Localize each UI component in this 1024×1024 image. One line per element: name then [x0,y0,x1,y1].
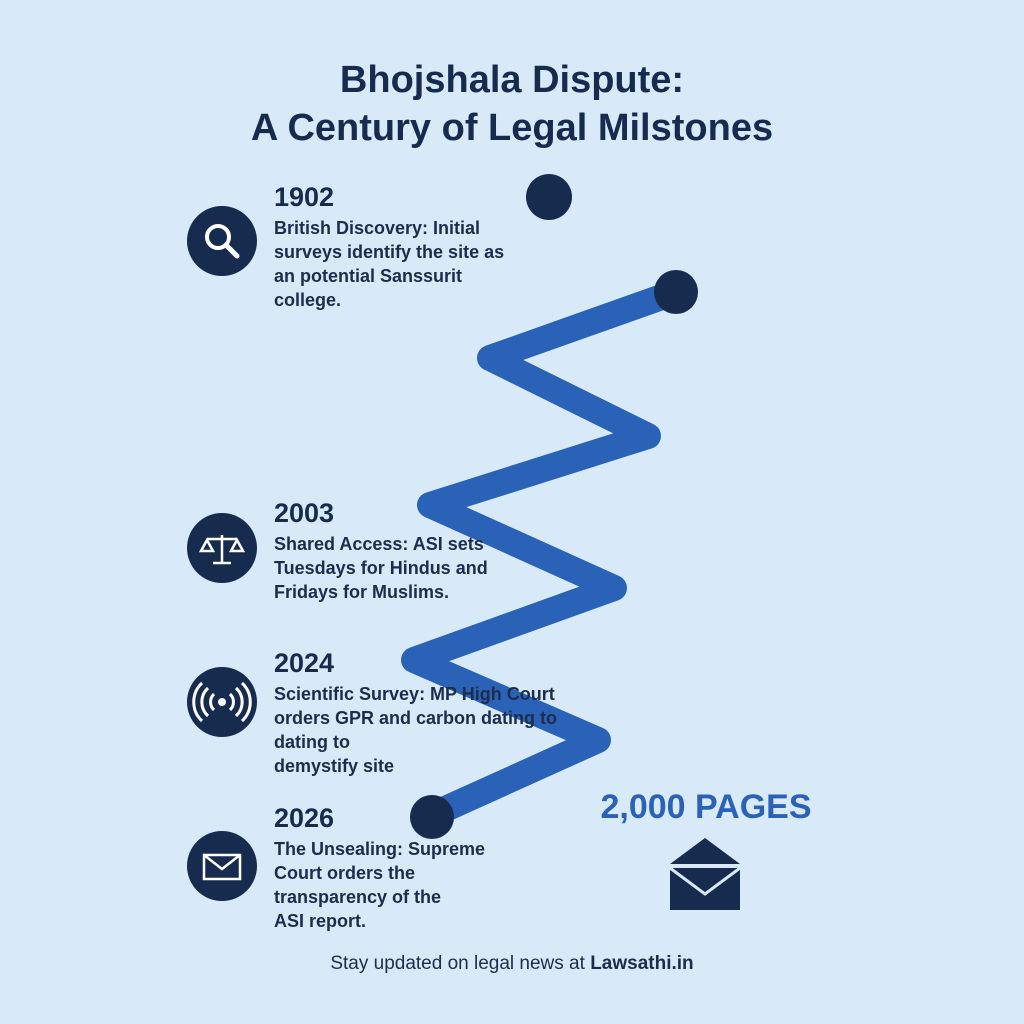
milestone 2024 [187,648,557,776]
milestone 2026 [187,803,485,931]
text 1902: college. [274,290,341,310]
text 2003 [274,534,488,602]
text 2024 [274,684,557,776]
stat: 2,000 PAGES [600,788,812,826]
icon: scales [187,513,257,583]
text 2026: Court orders the [274,863,415,883]
callout: 2,000 pages [600,788,812,910]
year 2003: 2003 [274,498,334,528]
year 2024: 2024 [274,648,334,678]
text 2026: transparency of the [274,887,441,907]
title [251,59,773,149]
text 1902: surveys identify the site as [274,242,504,262]
text 1902 [274,218,504,310]
icon: signal [187,667,257,737]
icon: envelope [187,831,257,901]
text 2026 [274,839,485,931]
text 2024: Scientific Survey: MP High Court [274,684,555,704]
icon: open envelope [670,838,740,910]
year 1902: 1902 [274,182,334,212]
text 2003: Tuesdays for Hindus and [274,558,488,578]
text 2026: The Unsealing: Supreme [274,839,485,859]
milestone 1902 [187,182,504,310]
text 2026: ASI report. [274,911,366,931]
text 2024: orders GPR and carbon dating to [274,708,557,728]
milestone 2003 [187,498,488,602]
title: A Century of Legal Milstones [251,107,773,149]
text 2003: Shared Access: ASI sets [274,534,484,554]
year 2026: 2026 [274,803,334,833]
footer: Stay updated on legal news at Lawsathi.in [330,953,694,974]
title: Bhojshala Dispute: [340,59,684,101]
text 2024: dating to [274,732,350,752]
icon: magnifier [187,206,257,276]
text 2024: demystify site [274,756,394,776]
text 1902: an potential Sanssurit [274,266,462,286]
text 1902: British Discovery: Initial [274,218,480,238]
text 2003: Fridays for Muslims. [274,582,449,602]
